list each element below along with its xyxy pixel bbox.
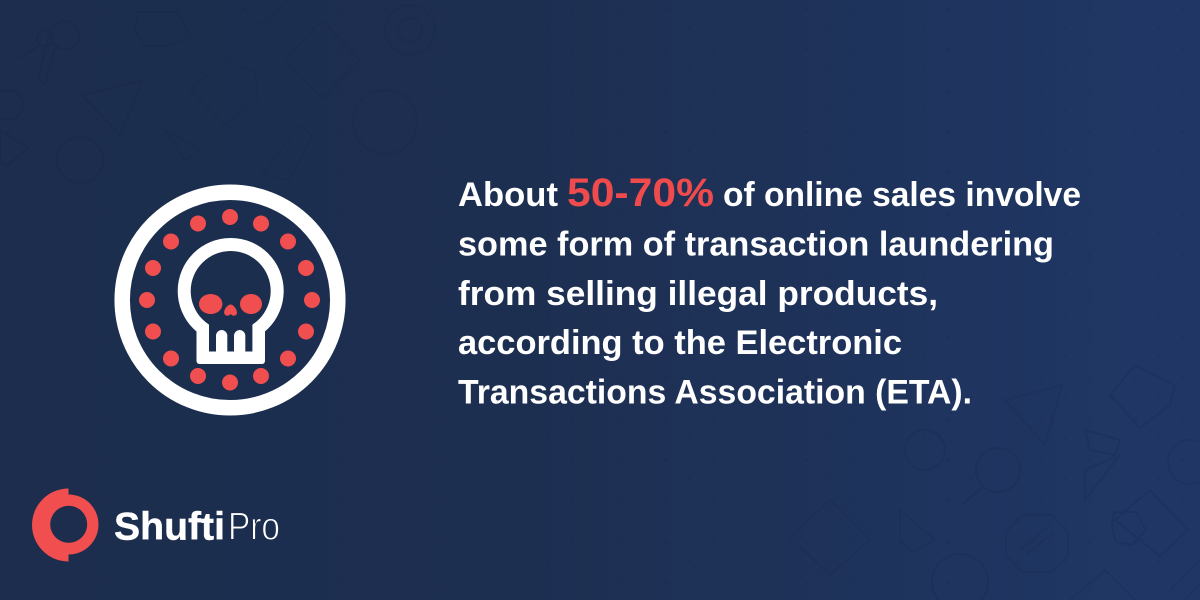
highlighted statistic: 50-70% [567, 171, 714, 215]
logo: ShuftiPro: Pro [228, 506, 280, 548]
skull [178, 238, 284, 364]
headline statistic text: About [458, 176, 558, 214]
headline statistic text: according to the Electronic [458, 324, 902, 362]
headline statistic text: of online sales involve [723, 176, 1081, 214]
headline statistic text: some form of transaction laundering [458, 226, 1054, 264]
icon: skull in dotted ring [122, 192, 338, 408]
headline statistic text [458, 171, 1081, 412]
logo: ShuftiPro [32, 488, 280, 562]
headline statistic text: from selling illegal products, [458, 275, 938, 313]
logo wordmark: Shufti [114, 506, 225, 548]
headline statistic text: Transactions Association (ETA). [458, 374, 972, 412]
red dot ring [139, 209, 320, 390]
white outer ring [122, 192, 338, 408]
logo mark [32, 488, 99, 562]
